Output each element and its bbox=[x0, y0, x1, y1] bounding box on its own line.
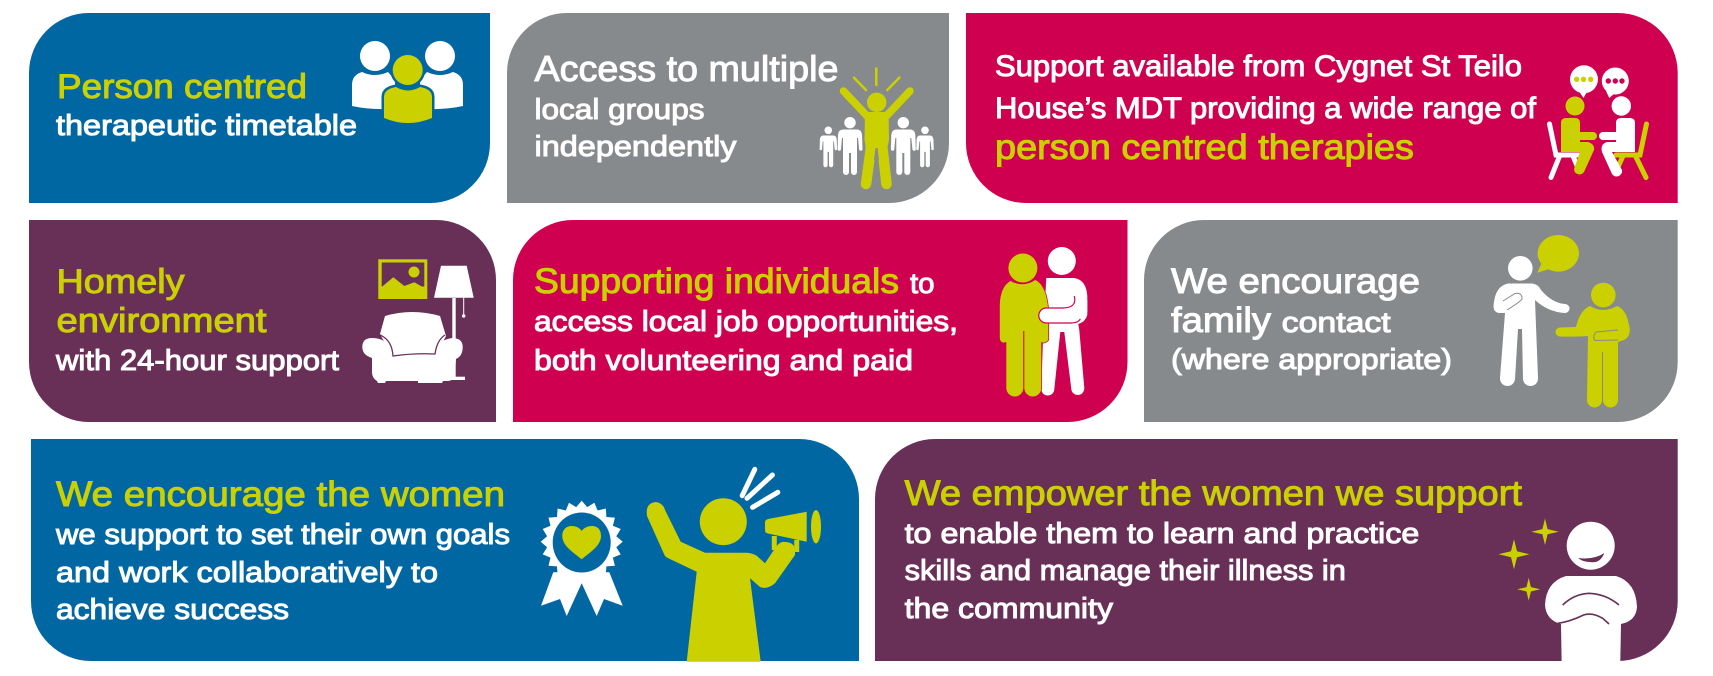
panel: empowering women bbox=[875, 439, 1678, 661]
body text line 2: House’s MDT providing a wide range of bbox=[995, 92, 1537, 125]
body text: with 24-hour support bbox=[55, 345, 339, 377]
icon: group of three people bbox=[352, 41, 463, 123]
icon: two people talking at chairs bbox=[1550, 65, 1646, 178]
heading continuation: to bbox=[910, 268, 934, 300]
panel background bbox=[966, 13, 1678, 203]
body text line 2: skills and manage their illness in bbox=[905, 555, 1346, 587]
body text line 1: to enable them to learn and practice bbox=[905, 518, 1419, 550]
body text line 2: and work collaboratively to bbox=[56, 557, 438, 589]
body text line 1: Support available from Cygnet St Teilo bbox=[995, 50, 1522, 83]
emphasised word: family bbox=[1171, 301, 1272, 340]
heading: Supporting individuals bbox=[534, 262, 899, 301]
body text line 2: (where appropriate) bbox=[1171, 344, 1452, 376]
heading: We encourage bbox=[1171, 262, 1420, 301]
heading: We encourage the women bbox=[56, 475, 505, 514]
panel background bbox=[1144, 220, 1678, 422]
body text line 3: the community bbox=[905, 593, 1114, 625]
heading line 2: environment bbox=[56, 302, 267, 340]
body text line 2: independently bbox=[534, 131, 737, 163]
body text line 1: access local job opportunities, bbox=[534, 306, 958, 338]
panel background bbox=[31, 439, 859, 661]
heading: We empower the women we support bbox=[905, 474, 1522, 513]
panel: homely environment bbox=[29, 220, 496, 422]
heading: Person centred bbox=[57, 68, 307, 106]
panel background bbox=[29, 220, 496, 422]
icon: award rosette with heart bbox=[541, 501, 623, 616]
panel: supporting individuals bbox=[513, 220, 1128, 422]
heading: Access to multiple bbox=[534, 48, 838, 89]
icon: lime figure with arms raised among people bbox=[820, 68, 934, 184]
body text line 3: achieve success bbox=[56, 594, 289, 626]
panel background bbox=[513, 220, 1128, 422]
panel: family contact bbox=[1144, 220, 1678, 422]
body text: therapeutic timetable bbox=[56, 110, 357, 142]
icon: figure with megaphone bbox=[647, 469, 821, 662]
icon: two people talking with speech bubble bbox=[1494, 235, 1630, 408]
icon: smiling figure with folded arms bbox=[1545, 522, 1637, 661]
heading line 1: Homely bbox=[56, 263, 184, 301]
body text: contact bbox=[1282, 307, 1391, 339]
body text line 2: both volunteering and paid bbox=[534, 345, 913, 377]
panel: person centred timetable bbox=[29, 13, 490, 203]
panel: access to local groups bbox=[507, 13, 949, 203]
body text line 1: we support to set their own goals bbox=[55, 519, 510, 551]
body text line 1: local groups bbox=[534, 94, 704, 126]
panel: MDT therapies bbox=[966, 13, 1678, 203]
panel background bbox=[507, 13, 949, 203]
icon: sparkles bbox=[1498, 518, 1559, 601]
panel background bbox=[29, 13, 490, 203]
highlighted text: person centred therapies bbox=[995, 128, 1414, 167]
panel: setting goals bbox=[31, 439, 859, 662]
icon: two people embracing bbox=[1000, 247, 1087, 396]
panel background bbox=[875, 439, 1678, 661]
icon: picture, lamp and armchair bbox=[362, 259, 474, 383]
